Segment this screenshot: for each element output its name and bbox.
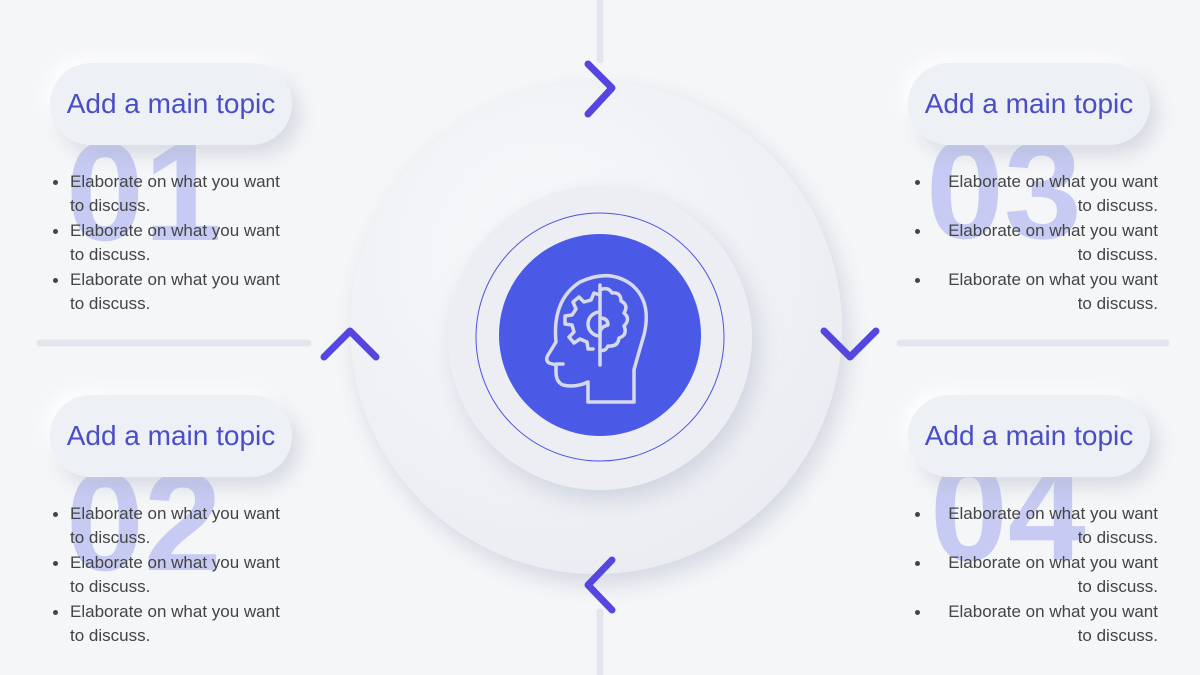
ring line [476,213,724,461]
list: topic 4: Elaborate on what you want to discuss. [948,504,1158,547]
list: topic 4: Elaborate on what you want to discuss. [948,602,1158,645]
inner circle [448,186,752,490]
list: topic 3: Elaborate on what you want to discuss. [948,221,1158,264]
pill: topic 4: Add a main topic [925,420,1133,451]
list: topic 4 [915,504,1158,645]
arrows [324,64,876,610]
number 01: 01 [66,113,222,270]
pill: topic 4 [908,395,1150,477]
list: topic 1: Elaborate on what you want to discuss. [70,270,280,313]
list: topic 1: Elaborate on what you want to discuss. [70,172,280,215]
list: topic 1 [53,172,280,313]
list: topic 3: Elaborate on what you want to discuss. [948,172,1158,215]
list: topic 4: Elaborate on what you want to discuss. [948,553,1158,596]
list: topic 3: Elaborate on what you want to discuss. [948,270,1158,313]
list: topic 2: Elaborate on what you want to discuss. [70,602,280,645]
list: topic 3 [915,172,1158,313]
pill: topic 1: Add a main topic [67,88,275,119]
number 04: 04 [930,433,1086,590]
number 03: 03 [926,111,1082,268]
pill: topic 2 [50,395,292,477]
icon: head with gear/brain [499,234,701,436]
list: topic 2 [53,504,280,645]
number 02: 02 [66,443,222,600]
outer circle [350,82,842,574]
pill: topic 3 [908,63,1150,145]
pill: topic 1 [50,63,292,145]
list: topic 2: Elaborate on what you want to discuss. [70,504,280,547]
list: topic 1: Elaborate on what you want to discuss. [70,221,280,264]
pill: topic 3: Add a main topic [925,88,1133,119]
list: topic 2: Elaborate on what you want to discuss. [70,553,280,596]
pill: topic 2: Add a main topic [67,420,275,451]
